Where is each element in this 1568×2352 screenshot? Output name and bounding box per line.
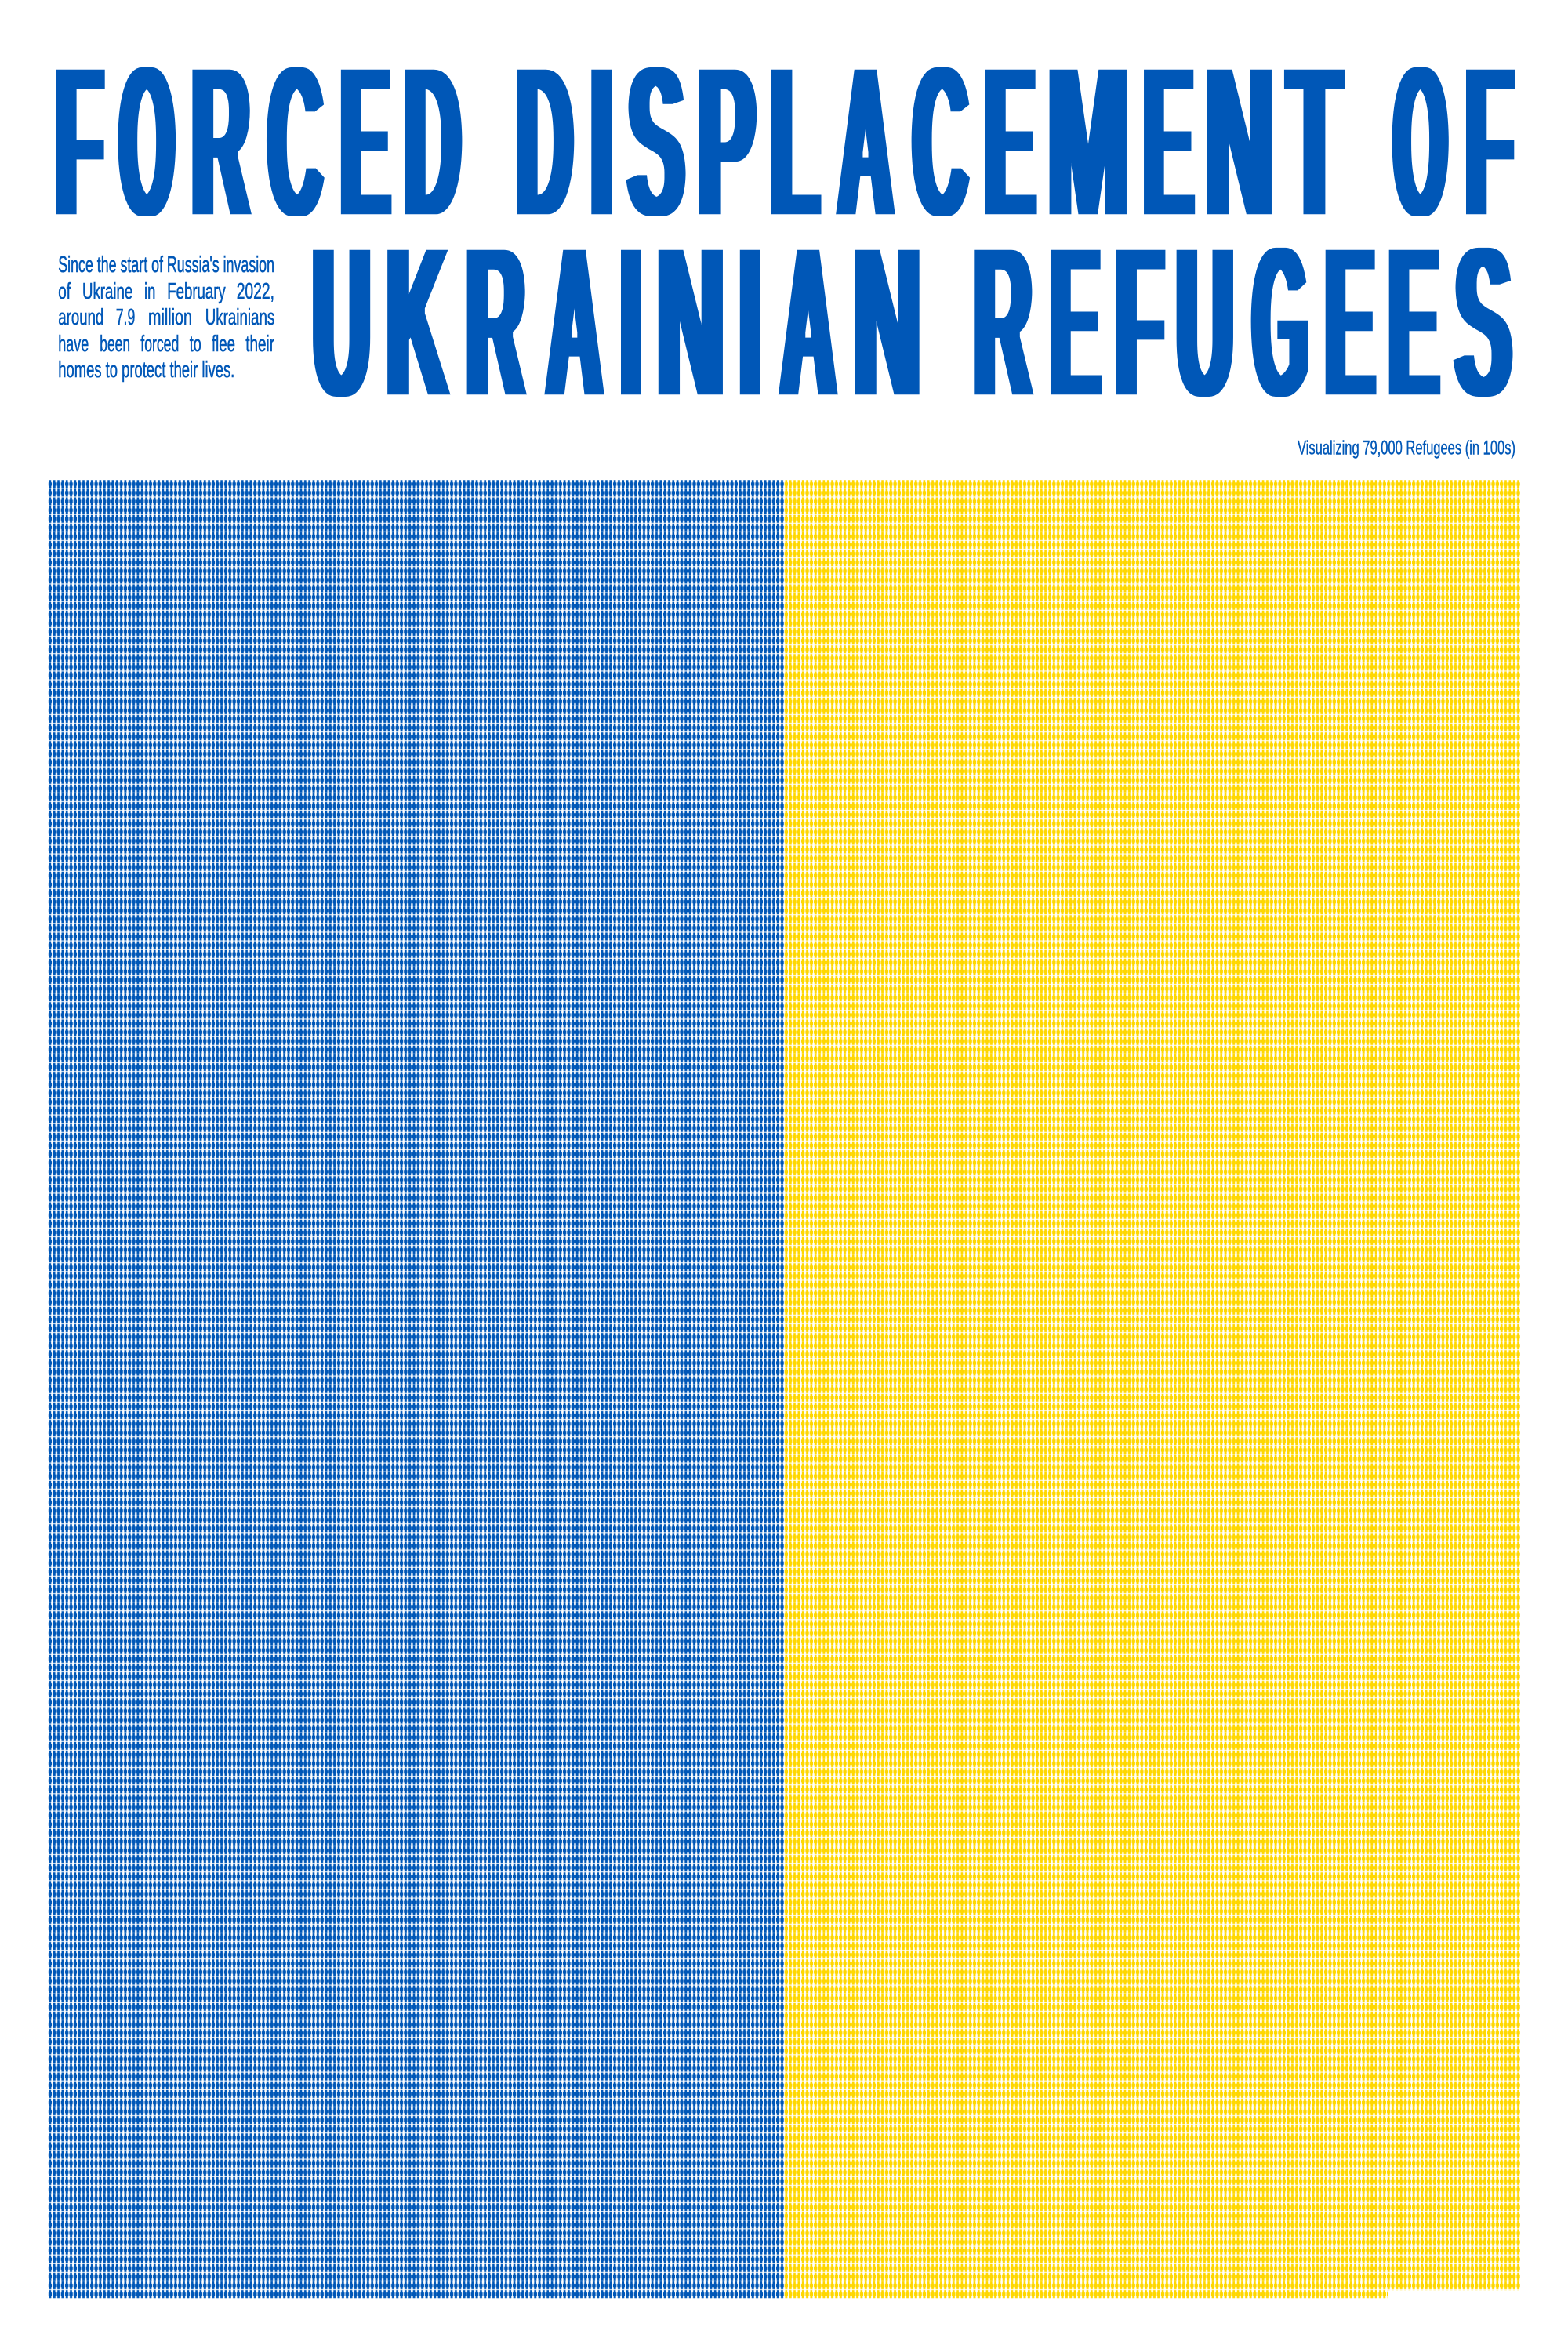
- title: first line: D: [517, 20, 572, 263]
- title: second line: F: [1116, 200, 1163, 443]
- title: first line: C: [913, 20, 967, 263]
- title: first line: O: [120, 20, 174, 263]
- intro text block: February: [167, 279, 226, 304]
- title: second line: G: [1253, 200, 1308, 443]
- title: second line: N: [853, 200, 921, 443]
- title: first line: C: [268, 20, 322, 263]
- title: second line: E: [1051, 200, 1100, 443]
- intro text block: flee: [212, 332, 235, 357]
- title: second line: R: [466, 200, 524, 443]
- intro text block: to: [190, 332, 201, 357]
- title: first line: F: [56, 20, 103, 263]
- intro text block: [58, 252, 274, 383]
- title: second line: U: [1177, 200, 1233, 443]
- intro text block: Ukraine: [82, 279, 132, 304]
- intro text block: been: [100, 332, 130, 357]
- yellow half of pictogram: [784, 480, 1520, 2299]
- title: first line: S: [628, 20, 684, 263]
- title: first line: E: [1144, 20, 1193, 263]
- title: second line: N: [657, 200, 724, 443]
- intro text block: million: [148, 305, 192, 330]
- intro text block: in: [144, 279, 155, 304]
- title: second line: K: [387, 200, 448, 443]
- title: first line: I: [591, 20, 612, 263]
- intro text block: Since the start of Russia's invasion: [58, 252, 274, 278]
- title: second line: I: [739, 200, 760, 443]
- title: first line: A: [838, 20, 893, 263]
- title: first line: P: [699, 20, 755, 263]
- title: second line: E: [1388, 200, 1439, 443]
- title: first line: T: [1288, 20, 1341, 263]
- title: second line: R: [973, 200, 1032, 443]
- title: first line: O: [1394, 20, 1447, 263]
- intro text block: forced: [140, 332, 179, 357]
- title: first line: D: [405, 20, 461, 263]
- blue half of pictogram: [49, 480, 784, 2299]
- title: second line: A: [546, 200, 602, 443]
- title: second line: A: [781, 200, 836, 443]
- title: first line: N: [1206, 20, 1273, 263]
- title: first line: L: [771, 20, 819, 263]
- pictogram chart: refugee icons forming the Ukrainian flag: [49, 480, 1520, 2299]
- intro text block: of: [58, 279, 71, 304]
- intro text block: 2022,: [237, 279, 274, 304]
- intro text block: Ukrainians: [205, 305, 274, 330]
- title: second line: U: [313, 200, 370, 443]
- title: first line: R: [192, 20, 249, 263]
- title: first line: E: [985, 20, 1035, 263]
- title: second line: I: [621, 200, 641, 443]
- intro text block: around: [58, 305, 103, 330]
- intro text block: have: [58, 332, 89, 357]
- title: first line: E: [341, 20, 390, 263]
- title: first line: M: [1047, 20, 1128, 263]
- intro text block: homes to protect their lives.: [58, 358, 234, 383]
- intro text block: their: [245, 332, 274, 357]
- title: second line: E: [1325, 200, 1374, 443]
- intro text block: 7.9: [116, 305, 135, 330]
